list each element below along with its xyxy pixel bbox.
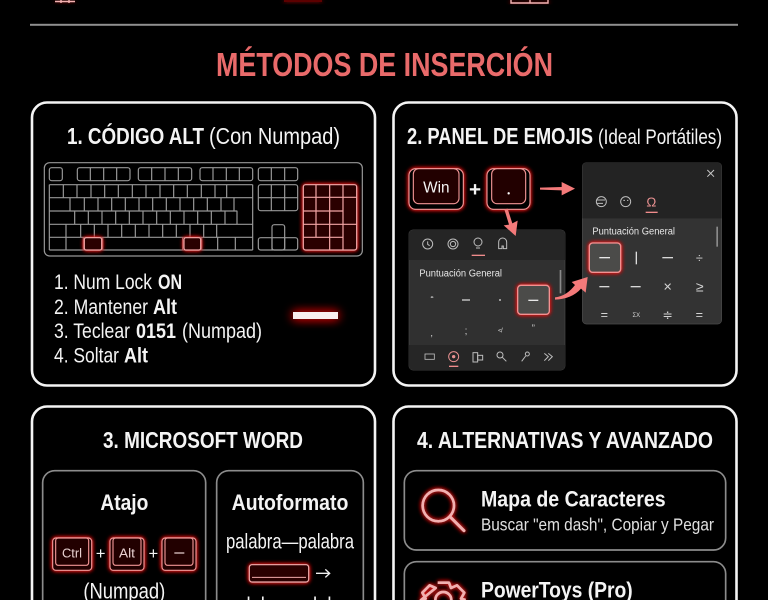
card: Atajo: [43, 471, 206, 600]
em dash sample: [293, 312, 338, 319]
card: Mapa de Caracteres: [404, 471, 726, 550]
icon: magnifying glass: [423, 490, 464, 531]
symbol grid: ×: [663, 279, 672, 295]
icon: gear: [421, 583, 466, 600]
Alt key highlights: [84, 238, 201, 250]
steps list: 1. Num Lock: [54, 270, 152, 294]
steps list: 2. Mantener: [54, 295, 148, 319]
steps list: [54, 270, 262, 368]
card: Atajo: Atajo: [100, 490, 148, 515]
symbol grid: ,: [430, 328, 433, 338]
tab icons: [423, 238, 507, 256]
card: Mapa de Caracteres: Buscar "em dash", Copiar y Pegar: [481, 515, 714, 535]
card: Atajo: +: [96, 544, 106, 563]
key: Win: Win: [423, 179, 450, 196]
card: PowerToys: [404, 562, 726, 600]
key: minus: [162, 538, 196, 570]
key: Alt: [110, 538, 144, 570]
emoji panel window: general: Puntuación General: [419, 268, 502, 279]
card: Autoformato: Autoformato: [232, 490, 348, 515]
key: Ctrl: Ctrl: [62, 547, 82, 561]
symbol grid: ≑: [662, 308, 673, 322]
bottom tab icons: [425, 352, 552, 367]
symbol grid: ΣX: [632, 313, 640, 319]
tab icons: Ω: [646, 194, 656, 209]
selected em dash cell: [589, 243, 621, 272]
steps list: Alt: [153, 295, 177, 319]
panel: 2. Panel de emojis: [394, 102, 736, 386]
symbol grid: ≥: [696, 278, 704, 294]
spacebar key: [249, 565, 309, 582]
panel: 4. Alternativas y avanzado: [394, 406, 736, 600]
steps list: 3. Teclear: [54, 319, 130, 343]
symbol grid: “: [430, 295, 434, 305]
numpad highlight: [303, 185, 357, 250]
panel: 3. Microsoft Word: [32, 406, 375, 600]
heading: Microsoft Word: 3. MICROSOFT WORD: [103, 427, 303, 453]
steps list: 4. Soltar: [54, 344, 119, 368]
emoji panel window: symbols: Puntuación General: [592, 226, 675, 237]
tab icons: [596, 194, 658, 213]
cropped icons from previous section: [55, 0, 548, 3]
card: Atajo: +: [148, 544, 158, 563]
card: Mapa de Caracteres: Mapa de Caracteres: [481, 487, 666, 512]
key: period: [487, 169, 530, 209]
panel: 1. Código ALT: [32, 102, 375, 386]
emoji panel window: symbols: [582, 163, 722, 324]
symbol grid: =: [696, 308, 703, 322]
symbol grid: ≮: [498, 326, 503, 334]
key: Ctrl: [53, 538, 92, 570]
arrow: [316, 569, 330, 577]
heading: Panel de emojis: (Ideal Portátiles): [598, 126, 722, 149]
emoji panel window: general: [409, 230, 565, 370]
symbol grid: ÷: [696, 251, 703, 265]
key: Win: [409, 169, 463, 209]
key: Alt: Alt: [119, 547, 136, 561]
steps list: 0151: [136, 319, 176, 343]
heading: Código ALT: 1. CÓDIGO ALT: [67, 122, 204, 149]
heading: Alternativas y avanzado: 4. ALTERNATIVAS Y AVANZADO: [417, 427, 713, 453]
title: MÉTODOS DE INSERCIÓN: [216, 46, 553, 83]
steps list: Alt: [124, 344, 148, 368]
heading: Panel de emojis: 2. PANEL DE EMOJIS: [407, 123, 593, 149]
selected em dash cell: [518, 285, 549, 314]
section divider: [30, 24, 738, 26]
arrow to symbols panel: [540, 182, 575, 195]
steps list: (Numpad): [182, 319, 262, 343]
card: Autoformato: palabra—palabra: [226, 529, 354, 553]
curved arrow between panels: [555, 277, 588, 300]
symbol grid: [599, 251, 704, 322]
heading: Código ALT: (Con Numpad): [209, 123, 340, 149]
plus sign: +: [469, 178, 481, 201]
keyboard diagram: [44, 163, 362, 256]
steps list: ON: [158, 270, 182, 294]
card: Autoformato: [217, 471, 363, 600]
arrow down to emoji panel: [504, 209, 518, 236]
heading: Código ALT: [67, 122, 340, 149]
symbol grid: ”: [532, 323, 535, 333]
symbol grid: =: [601, 308, 608, 322]
symbol grid: ;: [465, 326, 467, 337]
symbol grid: [430, 295, 538, 338]
